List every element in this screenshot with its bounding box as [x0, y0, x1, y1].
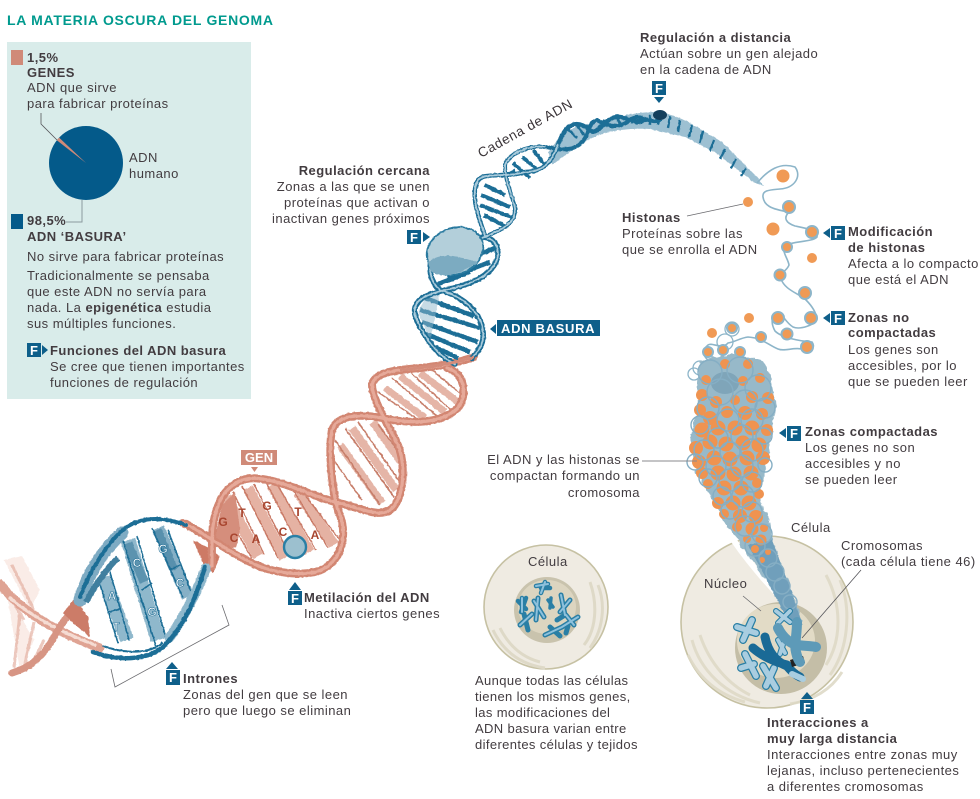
- tail shading: [748, 540, 802, 625]
- callout: zonas compactadas: se pueden leer: [805, 472, 898, 487]
- label: ADN humano: humano: [129, 166, 179, 181]
- pale fill lobe A: [418, 293, 440, 340]
- text: basura: ADN ‘BASURA’: [27, 229, 127, 244]
- letters: intron: T: [112, 620, 120, 634]
- callout: zonas compactadas: [779, 424, 938, 487]
- text: funciones: Funciones del ADN basura: [50, 343, 227, 358]
- callout: modificación de histonas: Afecta a lo compacto: [848, 256, 979, 271]
- callout: modificación de histonas: Modificación: [848, 224, 933, 239]
- rungs lobe C: [480, 150, 545, 226]
- pink rungs lobe 3: [378, 370, 463, 421]
- intron rungs: [98, 528, 193, 646]
- chromosome mid: [778, 622, 816, 662]
- callout: intrones: [166, 662, 351, 718]
- callout: interacciones: [767, 692, 959, 794]
- callout: interacciones: lejanas, incluso pertenecientes: [767, 763, 959, 778]
- pink rungs lobe 2: [335, 422, 403, 505]
- callout: histonas: Histonas: [622, 210, 681, 225]
- dense centre shade: [711, 372, 739, 394]
- swatch: genes: [11, 50, 23, 65]
- text: células: tienen los mismos genes,: [475, 689, 631, 704]
- bracket: intrones: [111, 605, 229, 687]
- icon: F: F: [30, 343, 38, 358]
- text: basura: que este ADN no servía para: [27, 284, 207, 299]
- callout: intrones: F: [169, 670, 177, 685]
- letters: gene: T: [294, 505, 302, 519]
- intron strands: [80, 519, 206, 658]
- callout: histonas: que se enrolla el ADN: [622, 242, 758, 257]
- panel: ADN humano: [7, 42, 251, 399]
- callout: zonas no compactadas: compactadas: [848, 325, 936, 340]
- rungs lobe B: [438, 248, 495, 284]
- letters: intron: C: [176, 576, 185, 590]
- text: células: ADN basura varian entre: [475, 721, 627, 736]
- blue loops: [687, 357, 797, 609]
- nucleus: [735, 602, 827, 694]
- letters: gene: C: [279, 525, 288, 539]
- text: células: las modificaciones del: [475, 705, 610, 720]
- letters: intron: C: [133, 556, 142, 570]
- text: basura: 98,5%: [27, 213, 66, 228]
- text: funciones: funciones de regulación: [50, 375, 198, 390]
- illustration: DNA helix pink: [0, 357, 474, 673]
- illustration: DNA helix blue intron: [80, 519, 206, 658]
- callout: regulación cercana: [272, 163, 430, 245]
- methylation dot: [284, 536, 306, 558]
- callout: compactación: [487, 452, 697, 500]
- callout: zonas no compactadas: que se pueden leer: [848, 374, 968, 389]
- title: LA MATERIA OSCURA DEL GENOMA: [7, 12, 273, 28]
- callout: metilación: [288, 582, 440, 621]
- rungs lobe A: [420, 298, 480, 358]
- fibre: [704, 165, 817, 360]
- pink strands: [183, 357, 474, 574]
- callout: interacciones: Interacciones a: [767, 715, 869, 730]
- callout: regulación cercana: Regulación cercana: [299, 163, 430, 178]
- rope band: tapered helix: [548, 112, 764, 186]
- callout: regulación a distancia: [640, 30, 818, 103]
- nucleus light: [518, 580, 576, 634]
- letters: gene: A: [252, 532, 261, 546]
- distant enhancer dot: [653, 110, 667, 120]
- chromosome dark: [753, 637, 800, 677]
- free histones: [707, 170, 817, 338]
- letters: gene: G: [218, 515, 228, 529]
- label: ADN BASURA: ADN BASURA: [501, 321, 595, 336]
- label: Núcleo: Núcleo: [704, 576, 747, 591]
- letters: gene: A: [311, 528, 320, 542]
- panel: small cell: [484, 545, 608, 669]
- text: células: Aunque todas las células: [475, 673, 629, 688]
- text: basura: epigenética estudia: [85, 300, 211, 315]
- cell shading: [688, 575, 847, 704]
- callout: zonas no compactadas: accesibles, por lo: [848, 358, 957, 373]
- callout: zonas compactadas: accesibles y no: [805, 456, 901, 471]
- callout: metilación: F: [291, 591, 299, 606]
- label: Célula big: Célula: [791, 520, 831, 535]
- callout: histonas: [622, 204, 758, 257]
- label: ADN humano: ADN: [129, 150, 158, 165]
- text: basura: nada. La: [27, 300, 85, 315]
- chromatin fibre and histones: [688, 165, 818, 380]
- chromosomes: big cell: [737, 611, 816, 688]
- callout: modificación de histonas: que está el ADN: [848, 272, 949, 287]
- callout: zonas no compactadas: F: [834, 311, 842, 326]
- text: basura: No sirve para fabricar proteínas: [27, 249, 224, 264]
- text: genes: GENES: [27, 65, 75, 80]
- callout: metilación: Inactiva ciertos genes: [304, 606, 440, 621]
- letters: gene: [218, 499, 320, 546]
- callout: regulación cercana: F: [410, 230, 418, 245]
- black patch: [790, 656, 805, 667]
- callout: interacciones: F: [803, 700, 811, 715]
- letters: gene: T: [238, 506, 246, 520]
- callout: zonas no compactadas: Zonas no: [848, 310, 910, 325]
- text: basura: Tradicionalmente se pensaba: [27, 268, 210, 283]
- bound histones: [703, 201, 818, 357]
- white gap beside tail: [728, 532, 788, 605]
- leader: cromosomas: [802, 570, 861, 638]
- text: genes: ADN que sirve: [27, 80, 117, 95]
- swatch: basura: [11, 214, 23, 229]
- callout: modificación de histonas: de histonas: [848, 240, 925, 255]
- callout: compactación: El ADN y las histonas se: [487, 452, 640, 467]
- pink rungs lobe 1: [193, 482, 340, 573]
- icon: F: [27, 343, 48, 358]
- ring loops: [688, 322, 739, 380]
- callout: zonas no compactadas: [823, 310, 968, 389]
- callout: modificación de histonas: F: [834, 226, 842, 241]
- pink tail under junk: [400, 357, 474, 370]
- text: basura: sus múltiples funciones.: [27, 316, 176, 331]
- illustration: protein on DNA: [419, 219, 491, 283]
- letters: gene: G: [262, 499, 272, 513]
- chromosome light group: [737, 611, 790, 688]
- chromatin cloud: [687, 354, 802, 625]
- callout: intrones: Intrones: [183, 671, 238, 686]
- label: Cadena de ADN: Cadena de ADN: [475, 96, 575, 161]
- callout: zonas compactadas: F: [790, 426, 798, 441]
- callout: compactación: cromosoma: [568, 485, 640, 500]
- callout: interacciones: a diferentes cromosomas: [767, 779, 924, 794]
- text: células: diferentes células y tejidos: [475, 737, 638, 752]
- strands lobe C, D and taper: [475, 115, 746, 238]
- callout: compactación: compactan formando un: [490, 468, 640, 483]
- orange histones: [689, 359, 774, 563]
- leader: genes: [41, 113, 57, 140]
- letters: intron: [108, 542, 185, 634]
- callout: modificación de histonas: [823, 224, 979, 287]
- callout: intrones: Zonas del gen que se leen: [183, 687, 348, 702]
- nucleus light: [737, 604, 815, 678]
- letters: gene: C: [230, 531, 239, 545]
- leader: basura: [66, 200, 82, 222]
- label: GEN: GEN: [245, 450, 273, 465]
- callout: zonas compactadas: Zonas compactadas: [805, 424, 938, 439]
- callout: regulación a distancia: Regulación a distancia: [640, 30, 792, 45]
- leader: núcleo: [743, 596, 761, 611]
- callout: regulación cercana: inactivan genes próximos: [272, 211, 430, 226]
- label: GEN: [241, 450, 277, 472]
- letters: intron: G: [158, 542, 168, 556]
- callout: histonas: Proteínas sobre las: [622, 226, 743, 241]
- callout: interacciones: Interacciones entre zonas muy: [767, 747, 958, 762]
- callout: regulación cercana: proteínas que activan o: [284, 195, 430, 210]
- text: genes: 1,5%: [27, 50, 59, 65]
- callout: regulación a distancia: en la cadena de ADN: [640, 62, 772, 77]
- cell shading: [493, 582, 602, 668]
- callout: zonas no compactadas: Los genes son: [848, 342, 939, 357]
- nucleus: [514, 577, 580, 643]
- callout: regulación a distancia: Actúan sobre un gen alejado: [640, 46, 818, 61]
- panel: big cell: [681, 536, 853, 708]
- callout: interacciones: muy larga distancia: [767, 731, 898, 746]
- left tail: [0, 556, 100, 673]
- letters: intron: G: [147, 605, 157, 619]
- illustration: DNA helix blue junk: [400, 112, 764, 370]
- callout: zonas compactadas: Los genes no son: [805, 440, 915, 455]
- label: Cromosomas: Cromosomas: [841, 538, 923, 553]
- text: funciones: Se cree que tienen importantes: [50, 359, 245, 374]
- callout: intrones: pero que luego se eliminan: [183, 703, 351, 718]
- label: Célula small: Célula: [528, 554, 568, 569]
- callout: regulación cercana: Zonas a las que se unen: [277, 179, 430, 194]
- letters: intron: A: [108, 589, 117, 603]
- text: genes: para fabricar proteínas: [27, 96, 169, 111]
- pie chart: [49, 126, 123, 200]
- callout: regulación a distancia: F: [655, 81, 663, 96]
- callout: metilación: Metilación del ADN: [304, 590, 430, 605]
- strands lobe A and B: [415, 237, 498, 364]
- label: Cromosomas: (cada célula tiene 46): [841, 554, 976, 569]
- chromosomes: [518, 582, 578, 636]
- chromosome light bottom: [792, 674, 803, 679]
